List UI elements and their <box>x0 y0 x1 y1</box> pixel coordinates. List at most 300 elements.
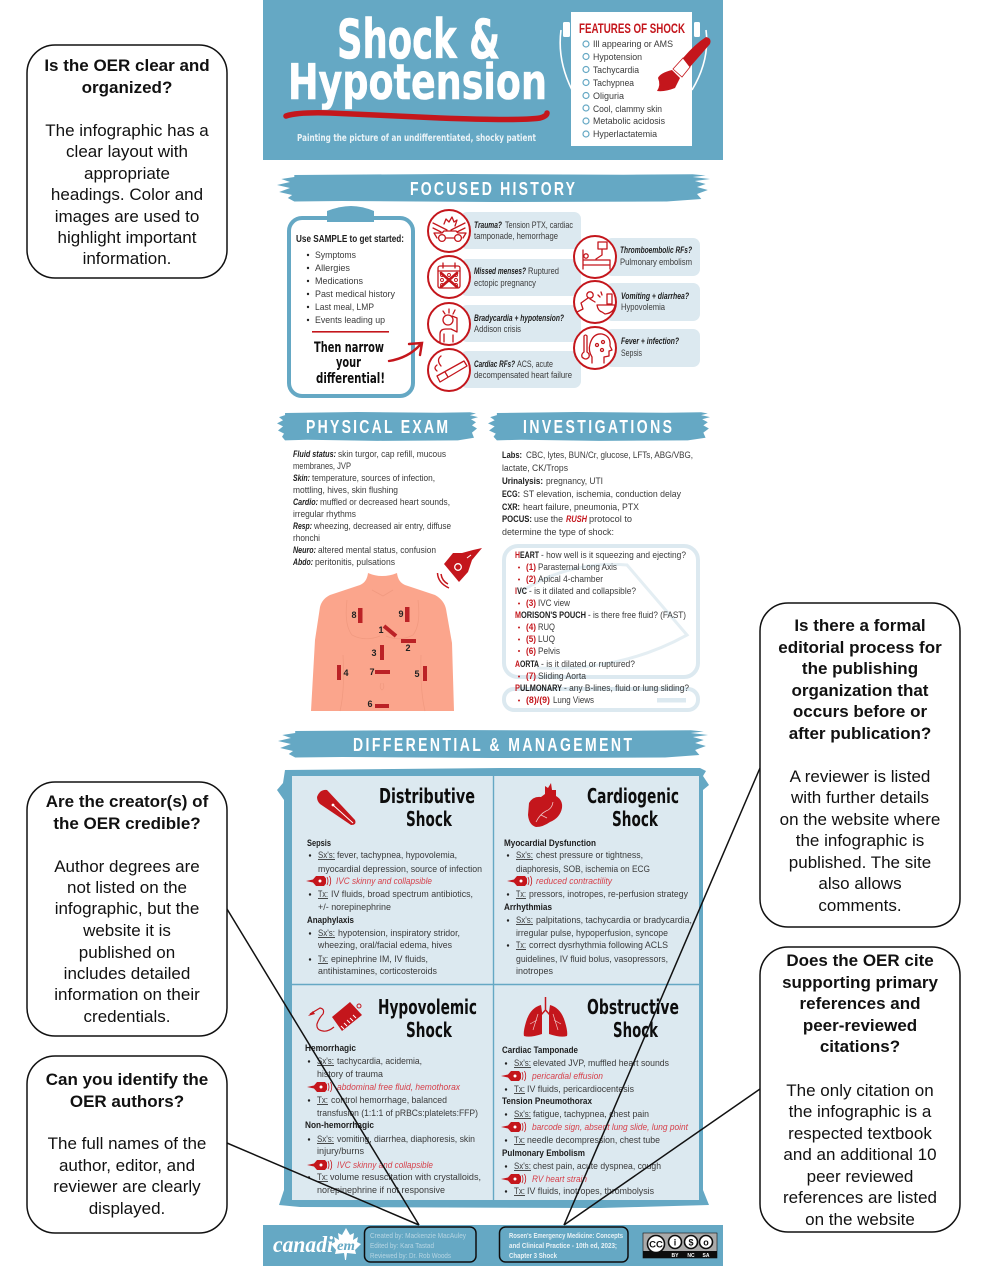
text block: pressors, inotropes, re-perfusion strategy <box>529 889 688 899</box>
text block: tachycardia, acidemia, <box>337 1056 422 1066</box>
callout: citations: Does the OER cite <box>786 951 934 970</box>
callout: clear and organized: clear layout with <box>66 142 188 161</box>
investigations text: CBC, lytes, BUN/Cr, glucose, LFTs, ABG/VBG, <box>526 450 693 460</box>
trauma text: Tension PTX, cardiac <box>505 220 573 230</box>
SAMPLE list <box>307 250 395 325</box>
text block: RV heart strain <box>532 1174 587 1184</box>
text block: Sx's: <box>317 1134 334 1144</box>
callout: creator credibility: information on their <box>54 985 200 1004</box>
investigations text: use the <box>534 514 563 524</box>
aorta: (7) <box>526 671 536 681</box>
RUSH protocol panel <box>504 546 698 710</box>
text block: epinephrine IM, IV fluids, <box>331 954 428 964</box>
aorta: Sliding Aorta <box>538 671 587 681</box>
text block: irregular pulse, hypoperfusion, syncope <box>516 928 668 938</box>
text block: Sepsis <box>307 838 331 848</box>
heading <box>587 995 679 1042</box>
SAMPLE list: Past medical history <box>315 289 395 299</box>
missed menses text: Missed menses? <box>474 266 526 276</box>
text block: Tx: <box>514 1084 525 1094</box>
text block: IV fluids, pericardiocentesis <box>527 1084 634 1094</box>
text block: injury/burns <box>317 1146 364 1156</box>
CC BY NC SA badge: BY <box>672 1253 679 1259</box>
features list: Cool, clammy skin <box>593 104 662 115</box>
morison's pouch: RUQ <box>538 622 555 632</box>
text block: Non-hemorrhagic <box>305 1120 374 1130</box>
morison's pouch <box>515 610 686 656</box>
icon: IV bag <box>308 1002 362 1031</box>
logo: canadiEM: canadi <box>273 1232 334 1257</box>
text block: +/- norepinephrine <box>318 902 391 912</box>
callout: creator credibility: Author degrees are <box>54 857 200 876</box>
panel: obstructive shock <box>501 995 688 1196</box>
text block: IV fluids, broad spectrum antibiotics, <box>331 889 473 899</box>
text block <box>501 1045 688 1196</box>
then narrow note <box>314 340 385 387</box>
callout: editorial process: Is there a formal <box>794 616 926 635</box>
morison's pouch: (4) <box>526 622 536 632</box>
heading: Shock <box>406 807 453 831</box>
callout: citations: on the website <box>805 1210 915 1229</box>
CC BY NC SA badge: SA <box>703 1253 710 1259</box>
text block: Sx's: <box>514 1058 531 1068</box>
heading: Shock <box>612 807 659 831</box>
callout: citations: The only citation on <box>786 1081 934 1100</box>
author credits: Reviewed by: Dr. Rob Woods <box>370 1251 451 1260</box>
aorta: ORTA <box>520 659 539 669</box>
text block: fatigue, tachypnea, chest pain <box>533 1109 649 1119</box>
subtitle: Painting the picture of an undifferentiated, shocky patient <box>297 133 536 144</box>
callout: citations: supporting primary <box>782 973 938 992</box>
text block: vomiting, diarrhea, diaphoresis, skin <box>337 1134 475 1144</box>
heading: Shock <box>406 1018 453 1042</box>
aorta <box>515 659 635 681</box>
text block: chest pain, acute dyspnea, cough <box>533 1161 661 1171</box>
investigations text: ST elevation, ischemia, conduction delay <box>523 489 681 499</box>
physical exam text: wheezing, decreased air entry, diffuse <box>313 521 451 531</box>
text block: Tension Pneumothorax <box>502 1096 592 1106</box>
text block: hypotension, inspiratory stridor, <box>338 928 460 938</box>
text block: Cardiac Tamponade <box>502 1045 578 1055</box>
callout: creator credibility: credentials. <box>84 1007 170 1026</box>
icon: lungs <box>524 997 567 1037</box>
text block: reduced contractility <box>536 876 612 886</box>
callout: clear and organized: highlight important <box>58 228 197 247</box>
trauma text <box>474 220 573 241</box>
callout: creator credibility: published on <box>79 943 175 962</box>
callout: editorial process: also allows <box>818 874 902 893</box>
text block: Sx's: <box>514 1161 531 1171</box>
author credits: Created by: Mackenzie MacAuley <box>370 1231 466 1240</box>
morison's pouch: M <box>515 610 521 620</box>
text block: Tx: <box>516 940 526 950</box>
pulmonary: ULMONARY <box>520 683 562 693</box>
aorta: A <box>515 659 520 669</box>
text block: Tx: <box>317 1172 328 1182</box>
investigations text: pregnancy, UTI <box>546 476 603 486</box>
vomiting text <box>621 291 689 312</box>
callout: citations: peer reviewed <box>807 1167 913 1186</box>
chest diagram: 8 <box>351 610 357 620</box>
morison's pouch: LUQ <box>538 634 555 644</box>
vomiting text: Hypovolemia <box>621 302 666 312</box>
morison's pouch: ORISON'S POUCH <box>521 610 586 620</box>
heading: Obstructive <box>587 995 679 1019</box>
text block: Hemorrhagic <box>305 1043 356 1053</box>
text block: Tx: <box>317 1095 328 1105</box>
callout: identify authors: Can you identify the <box>46 1070 208 1089</box>
missed menses text <box>474 266 559 288</box>
cardiac RFs text: decompensated heart failure <box>474 370 572 380</box>
text block: Tx: <box>318 889 328 899</box>
ivc: (3) <box>526 598 536 608</box>
arrow <box>389 343 422 361</box>
ivc: IVC view <box>538 598 570 608</box>
chest diagram: 9 <box>398 609 404 619</box>
morison's pouch: Pelvis <box>538 646 560 656</box>
text block: IVC skinny and collapsible <box>336 876 432 886</box>
missed menses text: ectopic pregnancy <box>474 278 536 288</box>
callout: editorial process: the publishing <box>802 659 918 678</box>
chest diagram <box>311 573 454 711</box>
thromboembolic text: Thromboembolic RFs? <box>620 245 692 255</box>
citation: Rosen's Emergency Medicine: Concepts <box>509 1231 623 1240</box>
panel: differential grid <box>277 768 709 1208</box>
logo: canadiEM <box>273 1228 361 1260</box>
callout: creator credibility: includes detailed <box>64 964 190 983</box>
text block: myocardial depression, source of infection <box>318 864 482 874</box>
icon: hospital bed <box>583 242 610 269</box>
section banner: investigations: INVESTIGATIONS <box>523 416 672 438</box>
aorta: - is it dilated or ruptured? <box>541 659 635 669</box>
panel: cardiogenic shock <box>504 783 692 976</box>
morison's pouch: (5) <box>526 634 536 644</box>
heading: Hypovolemic <box>378 995 477 1019</box>
panel: hypovolemic shock <box>305 995 481 1195</box>
cardiac RFs text: ACS, acute <box>517 359 553 369</box>
features list: Metabolic acidosis <box>593 116 665 127</box>
investigations text: POCUS: <box>502 514 532 524</box>
icon: ultrasound probe <box>438 548 482 588</box>
features list: Oliguria <box>593 91 625 102</box>
callout: editorial process: occurs before or <box>793 702 927 721</box>
investigations text: Urinalysis: <box>502 476 543 486</box>
physical exam text: skin turgor, cap refill, mucous <box>338 449 446 459</box>
callout: clear and organized: The infographic has a <box>45 121 209 140</box>
callout: clear and organized: appropriate <box>84 164 170 183</box>
investigations text <box>502 450 693 537</box>
callout: editorial process: with further details <box>790 788 929 807</box>
author credits <box>364 1227 476 1262</box>
text block: needle decompression, chest tube <box>527 1135 660 1145</box>
callout: creator credibility: website it is <box>82 921 171 940</box>
text block: volume resuscitation with crystalloids, <box>330 1172 481 1182</box>
callout: identify authors: displayed. <box>89 1199 165 1218</box>
callout: clear and organized: images are used to <box>55 207 199 226</box>
text block <box>504 838 692 976</box>
features list: Ill appearing or AMS <box>593 39 673 50</box>
callout: identify authors <box>27 1056 227 1233</box>
investigations text: lactate, CK/Trops <box>502 463 568 473</box>
text block <box>306 838 482 976</box>
heading <box>379 784 475 831</box>
missed menses text: Ruptured <box>528 266 559 276</box>
footer <box>263 1225 723 1266</box>
text block: wheezing, oral/facial edema, hives <box>317 940 452 950</box>
physical exam text: Resp: <box>293 521 312 531</box>
chest diagram: 1 <box>378 625 384 635</box>
callout: editorial process: A reviewer is listed <box>790 767 930 786</box>
icon: cigarette <box>435 356 467 382</box>
header panel <box>263 0 723 160</box>
text block: norepinephrine if not responsive <box>317 1185 445 1195</box>
section banner: investigations <box>488 412 710 441</box>
pulmonary: P <box>515 683 520 693</box>
CC BY NC SA badge: CC <box>649 1240 663 1250</box>
history items left column <box>428 210 581 391</box>
investigations text: determine the type of shock: <box>502 527 614 537</box>
text block: abdominal free fluid, hemothorax <box>337 1082 460 1092</box>
text block: Myocardial Dysfunction <box>504 838 596 848</box>
physical exam text: altered mental status, confusion <box>318 545 436 555</box>
heart: (2) <box>526 574 536 584</box>
SAMPLE list: Medications <box>315 276 363 286</box>
chest diagram: 3 <box>371 648 377 658</box>
text block: Tx: <box>318 954 328 964</box>
text block: transfusion (1:1:1 of pRBCs:platelets:FFP) <box>317 1108 478 1118</box>
ivc: I <box>515 586 517 596</box>
title <box>286 8 547 120</box>
text block: elevated JVP, muffled heart sounds <box>533 1058 669 1068</box>
callout: editorial process: after publication? <box>789 724 931 743</box>
infographic poster <box>263 0 723 1266</box>
title: Hypotension <box>288 54 547 111</box>
then narrow note: differential! <box>316 371 385 387</box>
text block: Sx's: <box>516 915 533 925</box>
ivc <box>515 586 636 608</box>
trauma text: Trauma? <box>474 220 502 230</box>
physical exam text: irregular rhythms <box>293 509 356 519</box>
citation: and Clinical Practice - 10th ed, 2023; <box>509 1241 617 1250</box>
features list: Tachypnea <box>593 78 635 89</box>
section banner: focused history <box>277 174 710 202</box>
title: Shock & <box>337 8 500 71</box>
icon: car crash <box>433 217 466 241</box>
CC BY NC SA badge: $ <box>688 1238 694 1248</box>
investigations text: protocol to <box>589 514 632 524</box>
text block: Tx: <box>516 889 526 899</box>
text block: correct dysrhythmia following ACLS <box>529 940 668 950</box>
callout: identify authors: reviewer are clearly <box>53 1177 201 1196</box>
heading: Shock <box>613 1018 659 1042</box>
text block: Sx's: <box>516 850 533 860</box>
section banner: differential and management: DIFFERENTIAL & MANAGEMENT <box>353 734 632 756</box>
heading: Cardiogenic <box>587 784 679 808</box>
citation: Chapter 3 Shock <box>509 1251 558 1260</box>
callout: citations: references are listed <box>783 1188 937 1207</box>
text block: guidelines, IV fluid bolus, vasopressors, <box>516 954 668 964</box>
callout: identify authors: The full names of the <box>48 1134 206 1153</box>
investigations text: Labs: <box>502 450 522 460</box>
text block: control hemorrhage, balanced <box>331 1095 447 1105</box>
heading <box>587 784 679 831</box>
features of shock paint can <box>560 12 710 146</box>
pulmonary: (8)/(9) <box>526 695 550 705</box>
text block: palpitations, tachycardia or bradycardia, <box>536 915 692 925</box>
text block: Sx's: <box>317 1056 334 1066</box>
trauma text: tamponade, hemorrhage <box>474 231 558 241</box>
text block: diaphoresis, SOB, ischemia on ECG <box>516 864 650 874</box>
callout: citations: peer-reviewed <box>803 1016 917 1035</box>
icon: thermometer <box>317 790 356 825</box>
icon: heart <box>528 783 562 827</box>
features list: Tachycardia <box>593 65 640 76</box>
callout: editorial process: published. The site <box>789 853 931 872</box>
heart: EART <box>520 550 539 560</box>
SAMPLE heading: Use SAMPLE to get started: <box>296 234 404 245</box>
callout: editorial process: organization that <box>792 681 929 700</box>
callout: creator credibility: not listed on the <box>67 878 187 897</box>
ivc: - is it dilated and collapsible? <box>529 586 636 596</box>
callout: creator credibility: Are the creator(s) of <box>46 792 209 811</box>
physical exam text <box>292 449 451 567</box>
cardiac RFs text: Cardiac RFs? <box>474 359 515 369</box>
investigations text: ECG: <box>502 489 520 499</box>
callout: clear and organized: organized? <box>82 78 172 97</box>
ivc: VC <box>517 586 527 596</box>
physical exam text: rhonchi <box>293 533 320 543</box>
SAMPLE list: Allergies <box>315 263 350 273</box>
callout: creator credibility: the OER credible? <box>53 814 201 833</box>
features list: Hypotension <box>593 52 642 63</box>
author credits: Edited by: Kara Tastad <box>370 1241 434 1250</box>
text block: Sx's: <box>318 928 335 938</box>
text block <box>305 1043 481 1195</box>
callout: creator credibility <box>27 782 227 1036</box>
features list: Hyperlactatemia <box>593 129 658 140</box>
section banner: physical exam: PHYSICAL EXAM <box>306 416 448 438</box>
heart <box>515 550 686 584</box>
text block: Anaphylaxis <box>307 915 354 925</box>
vomiting text: Vomiting + diarrhea? <box>621 291 689 301</box>
investigations text: RUSH <box>566 514 587 524</box>
icon: paint brush <box>657 37 710 91</box>
physical exam text: muffled or decreased heart sounds, <box>320 497 450 507</box>
callout: clear and organized: information. <box>83 249 171 268</box>
panel: SAMPLE clipboard <box>289 206 413 396</box>
physical exam text: mottling, hives, skin flushing <box>293 485 398 495</box>
panel: distributive shock <box>306 784 482 976</box>
text block: Tx: <box>514 1186 525 1196</box>
callout: creator credibility: infographic, but the <box>55 899 199 918</box>
heart: Apical 4-chamber <box>538 574 603 584</box>
chest diagram: 5 <box>414 669 420 679</box>
SAMPLE list: Last meal, LMP <box>315 302 374 312</box>
text block: Pulmonary Embolism <box>502 1148 585 1158</box>
icon: calendar <box>438 263 460 288</box>
callout: citations: respected textbook <box>788 1124 932 1143</box>
callout: identify authors: OER authors? <box>70 1092 184 1111</box>
icon: feverish head <box>582 334 612 363</box>
text block: IVC skinny and collapsible <box>337 1160 433 1170</box>
physical exam text: Skin: <box>293 473 310 483</box>
physical exam text: peritonitis, pulsations <box>315 557 395 567</box>
callout: editorial process: comments. <box>818 896 902 915</box>
then narrow note: Then narrow <box>314 340 384 356</box>
investigations text: CXR: <box>502 502 520 512</box>
callout: editorial process: the infographic is <box>796 831 924 850</box>
SAMPLE list: Symptoms <box>315 250 356 260</box>
section banner: physical exam <box>277 412 478 441</box>
heart: - how well is it squeezing and ejecting? <box>541 550 686 560</box>
features heading: FEATURES OF SHOCK <box>579 20 685 36</box>
citation <box>500 1227 628 1262</box>
text block: chest pressure or tightness, <box>536 850 643 860</box>
morison's pouch: - is there free fluid? (FAST) <box>588 610 686 620</box>
fever text: Sepsis <box>621 348 642 358</box>
chest diagram: 2 <box>405 643 411 653</box>
heading <box>378 995 477 1042</box>
icon: person with headache <box>440 309 457 342</box>
text block: Sx's: <box>514 1109 531 1119</box>
heart: (1) <box>526 562 536 572</box>
chest diagram: 6 <box>367 699 373 709</box>
callout: citations <box>760 947 960 1232</box>
text block: inotropes <box>516 966 553 976</box>
pulmonary <box>515 683 689 705</box>
callout: clear and organized: headings. Color and <box>51 185 203 204</box>
SAMPLE list: Events leading up <box>315 315 385 325</box>
heart: H <box>515 550 520 560</box>
text block: fever, tachypnea, hypovolemia, <box>337 850 457 860</box>
heading: Distributive <box>379 784 475 808</box>
text block: Sx's: <box>318 850 335 860</box>
text block: Tx: <box>514 1135 525 1145</box>
chest diagram: 7 <box>369 667 375 677</box>
pulmonary: Lung Views <box>553 695 594 705</box>
bradycardia text: Bradycardia + hypotension? <box>474 313 564 323</box>
CC BY NC SA badge <box>643 1233 717 1259</box>
physical exam text: Neuro: <box>293 545 316 555</box>
physical exam text: Abdo: <box>292 557 313 567</box>
bradycardia text <box>474 313 564 334</box>
CC BY NC SA badge: i <box>674 1238 676 1248</box>
features list <box>583 39 673 140</box>
physical exam text: Cardio: <box>293 497 318 507</box>
section banner: focused history: FOCUSED HISTORY <box>410 178 575 200</box>
chest diagram: 4 <box>343 668 349 678</box>
cardiac RFs text <box>474 359 572 380</box>
CC BY NC SA badge: NC <box>687 1253 695 1259</box>
callout: citations: references and <box>800 994 920 1013</box>
text block: history of trauma <box>317 1069 384 1079</box>
physical exam text: temperature, sources of infection, <box>312 473 435 483</box>
callout: clear and organized <box>27 45 227 278</box>
text block: barcode sign, absent lung slide, lung point <box>532 1122 688 1132</box>
callout: editorial process <box>760 603 960 927</box>
section banner: differential and management <box>278 730 708 758</box>
callout: citations: citations? <box>820 1037 900 1056</box>
callout: citations: and an additional 10 <box>783 1145 937 1164</box>
callout: editorial process: editorial process for <box>778 638 942 657</box>
logo: canadiEM: em <box>337 1239 355 1254</box>
investigations text: heart failure, pneumonia, PTX <box>523 502 639 512</box>
text block: pericardial effusion <box>531 1071 603 1081</box>
thromboembolic text <box>620 245 692 267</box>
then narrow note: your <box>336 355 361 371</box>
text block: IV fluids, inotropes, thrombolysis <box>527 1186 654 1196</box>
icon: vomiting over toilet <box>577 292 615 314</box>
